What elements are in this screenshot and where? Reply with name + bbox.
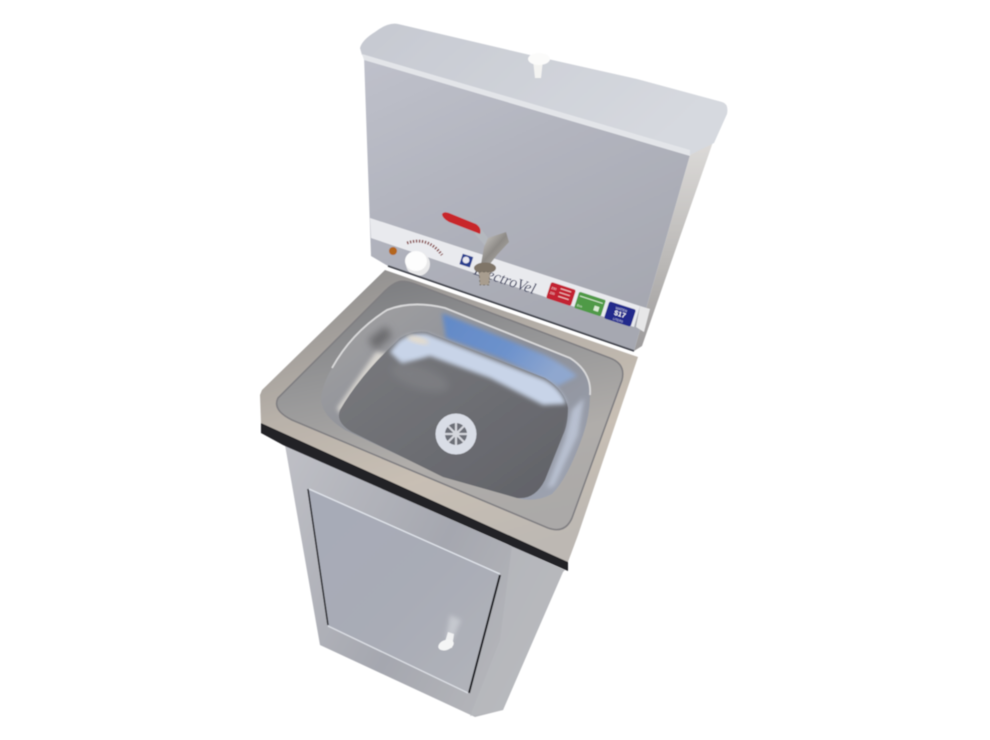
cabinet corner panel <box>470 545 563 716</box>
basin floor <box>339 332 568 498</box>
basin <box>321 304 590 500</box>
lid knob <box>528 53 550 78</box>
faucet red handle <box>442 212 480 234</box>
cabinet body <box>285 445 565 717</box>
hose barb <box>479 272 490 285</box>
floor highlight warm spot <box>407 334 429 346</box>
green badge <box>574 292 606 316</box>
brand name: ElectroVel <box>471 261 538 298</box>
basin right reflection <box>547 398 584 488</box>
basin lip highlight <box>332 304 590 395</box>
blue badge: WATER <box>615 306 628 314</box>
basin dark corner <box>368 326 392 350</box>
water tank <box>360 24 727 351</box>
tank side panel <box>634 142 713 351</box>
basin wall <box>321 304 590 500</box>
floor shine <box>388 358 452 398</box>
blue badge: LITERS <box>612 317 624 324</box>
red badge: 220 <box>549 291 556 296</box>
red badge <box>546 282 576 306</box>
lid front edge <box>362 54 690 156</box>
basin left reflection <box>337 352 390 414</box>
sink rim <box>277 281 623 530</box>
cabinet door <box>307 489 500 693</box>
indicator light <box>389 247 397 255</box>
green badge: Eco <box>576 303 583 309</box>
blue badge <box>604 301 636 327</box>
temperature knob <box>405 251 430 276</box>
sink countertop <box>260 270 638 571</box>
red badge: 230 <box>551 286 557 291</box>
door knob <box>437 615 461 652</box>
countertop surface <box>260 270 638 562</box>
black edge band <box>261 422 568 571</box>
faucet <box>442 212 509 285</box>
cabinet base <box>285 445 565 717</box>
tank underside shadow <box>388 266 634 351</box>
brand logo <box>459 254 473 268</box>
tank lid <box>360 24 727 155</box>
drain <box>436 414 476 454</box>
faucet lever <box>475 226 491 247</box>
faucet nut <box>474 262 496 274</box>
basin blue reflection <box>442 313 577 386</box>
tank front panel <box>364 56 690 351</box>
faucet body <box>481 232 509 264</box>
white label strip <box>370 218 650 332</box>
temperature dial scale <box>407 241 442 255</box>
blue badge: $17 <box>613 310 626 320</box>
floor highlight <box>390 334 566 405</box>
